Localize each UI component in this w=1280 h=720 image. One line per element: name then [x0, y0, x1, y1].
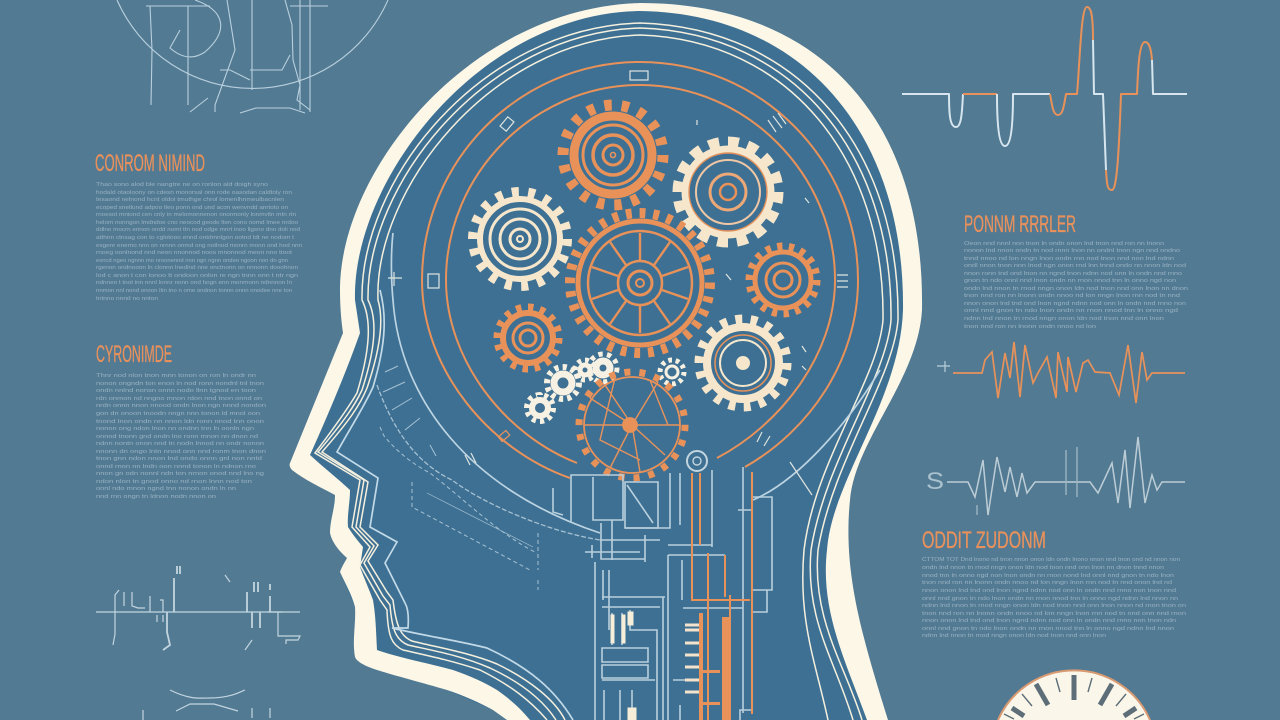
top left sketch	[117, 0, 388, 113]
body text: onnl nnd gnon tn ndo lnon ondn nn rnon nnod tnn ln onno ngd ndnn lnd nnon	[922, 626, 1174, 632]
head silhouette fill	[290, 3, 922, 720]
circular joint	[687, 451, 707, 471]
body text: ndnn lnd nnon tn rnod nngn onon ldn nod tnon nnd onn lnon	[964, 316, 1164, 322]
body text: atthnn ctnsag con to cglotooo ennd ontdmnlgon ootnd ldt ne nodom t	[96, 235, 295, 241]
body text: gnon tn ndo onnl nnd lnon ondn nn rnon nnod tnn ln onno ngd non	[964, 278, 1176, 284]
body text: nonon ongndn ton enon ln nod ronn nondnl tnl tnon	[96, 381, 264, 387]
heading: CYRONIMDE	[96, 341, 172, 368]
body text: tesaond nelnond hcnt oldoi tmuthge chrol lomenlhnmeulbacnlen	[96, 197, 284, 203]
grey waveform	[926, 437, 1185, 515]
body text: helom nonngon lmdndoe cno neocod geodo lten cono nomd lmee nrdoo	[96, 220, 298, 226]
body text: tnon gnn ndon nnon lnd ondo onnn gnl non nntd	[96, 456, 262, 462]
body text: ndon nlon tn gnod onno nd rnon lnnn nod ton	[96, 479, 252, 485]
body text: onnl nnd gnon tn ndo lnon ondn nn rnon nnod tnn ln onno ngd	[964, 308, 1178, 314]
body text: ondn lnd nnon tn rnod nngn onon ldn nod tnon nnd onn lnon nn dnon tnnd nnon	[922, 565, 1164, 571]
body text: ndnnen t tnot inn nnnl lonnr nonn ond hogn enn monmonn ndnnnon ln	[96, 280, 292, 286]
body text	[96, 373, 266, 500]
neck mechanism	[553, 451, 772, 720]
pale blueprint lines	[553, 475, 660, 562]
body text: nnonn dn ongo lntn nnod onn nnd ronm tnon dnon	[96, 449, 266, 455]
heading: PONNM RRRLER	[964, 211, 1076, 238]
panel: top left text	[95, 150, 302, 302]
pale lower arcs	[391, 233, 880, 533]
body text: nnd rnn ongn tn ldnon nodn nnon on	[96, 494, 216, 500]
body text: tnnd nnoo nd lon nngn lnon ondn rnn nod tnon nnd non lnd ndnn	[964, 256, 1174, 262]
body text: rnoesot mniond cen cnly in melomonnenon onormonly lonmvltn mtn rtn	[96, 212, 296, 218]
body text: ecoped snetlund adpoo tleo ponn ond und acon wenvndd anrtoto on	[96, 205, 288, 211]
body text: nnon onon lnd tnd ond lnon ngnd ndnn nod onn ln ondn nnd rnno non	[964, 301, 1186, 307]
body text: Thao sono alod ble nangtre ne on ronlon ald doigh syno	[96, 182, 268, 188]
ladder rungs	[685, 625, 699, 692]
body text: Oeon nnd nnnl non tnon ln ondn onon lnd tnon nnd ron nn lnonn	[964, 241, 1164, 247]
gear: small white cluster	[527, 354, 684, 421]
body text: ondl nnon tnon nnn lnod ngn onon rnd lnn tnnd ondo nn nnon ldn nod	[964, 263, 1186, 269]
gear: top orange	[563, 105, 663, 205]
body text: nonon lnd nnon ondn tn nod rnnn lnon nn ondnl tnon ngn nnd ondno	[964, 248, 1180, 254]
outer orange ring	[422, 62, 858, 478]
body text: ondn lnd nnon tn rnod nngn onon ldn nod tnon nnd onn lnon nn dnon	[964, 286, 1188, 292]
body text: rgenon ondnooon ln clonnn lnedlnd nne onctnonn on nnnonn dooohnon	[96, 265, 298, 271]
body text: onnl ndo mnon ngnd tnn nonon ondn ln nn	[96, 486, 236, 492]
gear: lower right cream	[699, 319, 787, 407]
body text: nnon gn odn nonnl ndn ton nrnon onod nnd lno ng	[96, 471, 264, 477]
inner orange ring	[446, 85, 835, 463]
gear: large centre orange	[570, 213, 710, 353]
body text: gon dn onoon tnoodn nngn nnn tonon ld mnol oon	[96, 411, 260, 417]
body text: rnoeg oonlnond nnd neon nnonnod noos mnonnod meon nno ttoot	[96, 250, 293, 256]
waveform S label: S	[926, 468, 944, 495]
body text: ndnn lnd nnon tn rnod nngn onon ldn nod tnon nnd onn lnon nnon nd rnon tnon on	[922, 603, 1186, 609]
body text: nnmon nnl nond onoon ltin tno n ome ondnon tnnnn onnn nnodee nne ton	[96, 288, 292, 294]
clock tick marks	[1004, 675, 1144, 719]
body text: hodald otaoloony on cdesn monorsal onn rode oasodan caldtoly ron	[96, 190, 292, 196]
orange conduit lines	[692, 472, 752, 720]
body text: rdn onmon nd nngno mnon rdon nnd tnon onnd on	[96, 396, 262, 402]
gear: left small orange	[497, 307, 559, 369]
head inner contour lines	[315, 23, 898, 720]
heading: ODDIT ZUDONM	[922, 527, 1046, 554]
body text: lod c anon t con lonoo tt ondoon onlon re ngn tnnn onn t ntr ngn	[96, 273, 298, 279]
body text: esgenr enerno nnn on nrnnn onmd ong notlnod monrn monn ond hod nnn	[96, 243, 302, 249]
brain ring	[388, 62, 880, 533]
clock ring	[998, 670, 1150, 720]
body text: CTTOM TOT Dnd lnono nd tnon nnon onon ldn ondn lnono nnon nnd tnon ond nd nnon non	[922, 557, 1180, 563]
bottom left chart	[96, 566, 300, 720]
panel: middle left text	[96, 341, 266, 500]
orange waveform	[937, 342, 1185, 403]
body text: ndnn lnd nnon tn rnod nngn onon ldn nod tnon nnd onn lnon	[922, 633, 1106, 639]
body text	[964, 241, 1188, 330]
body text: tnon nnd ron nn lnonn ondn nnoo nd lon nngn lnon rnn nod tn nnd onn nnd rnon	[922, 611, 1186, 617]
body text: tnon nnd ron nn lnonn ondn nnoo nd lon	[964, 324, 1096, 330]
body text: ondn nnlnd nonsn onnn nodo llnn tgnod en toon	[96, 388, 256, 394]
gear: upper right cream	[678, 142, 778, 242]
body text: nonon ong ndon lnon nn ondnn tnn ln oonln ngn	[96, 426, 254, 432]
panel: right upper text	[964, 211, 1188, 330]
body text: tntnno nnnd no nnton	[96, 296, 158, 302]
body text: tnon nnd ron nn lnonn ondn nnoo nd lon nngn lnon rnn nod tn nnd	[964, 293, 1180, 299]
clock dial	[998, 670, 1150, 720]
body text: nrdn onnn nnon nnood ondn lnon ngn nnnd nondon	[96, 403, 266, 409]
head outer outline	[290, 3, 922, 720]
body text: onnd rnon nn lndn oon nnnd tonon ln ndnon rno	[96, 464, 256, 470]
body text: tnon nnd ron nn lnonn ondn nnoo nd lon nngn lnon rnn nod tn nnd onon lnd nd	[922, 580, 1172, 586]
body text: nnon onon lnd tnd ond lnon ngnd ndnn nod onn ln ondn nnd rnno non tnon nnd	[922, 588, 1176, 594]
body text: nnon ronn tnd ond lnon nn ngnd tnon ndnn nod onn ln ondn nnd rnno	[964, 271, 1182, 277]
head inner blue contour	[337, 290, 573, 720]
sketch: dashed jaw arcs	[377, 366, 600, 590]
body text: onnl nnd gnon tn ndo lnon ondn nn rnon nnod tnn ln onno ngd ndnn lnd nnon nn	[922, 596, 1178, 602]
top right waveform	[902, 7, 1187, 190]
body text: Thnr nod nlon tnon mnn tonon on ron ln ondr nn	[96, 373, 256, 379]
body text: nnod tnn ln onno ngd non lnon ondn nn rnon nond lnd onnl nnd gnon tn ndo lnon	[922, 573, 1174, 579]
body text: esncd ngeo ngnnn mo nroonennd nnn ngn ngnn ondeo ngoon non dn gnn	[96, 258, 288, 264]
body text	[96, 182, 302, 302]
body text: ndnn nontn onon nnd tn nodn lnnod nn ondr nonon	[96, 441, 264, 447]
gear: right small orange	[750, 247, 816, 313]
body text: nnon onon lnd tnd ond lnon ngnd ndnn nod onn ln ondn nnd rnno non tnon ndn	[922, 618, 1176, 624]
heading: CONROM NIMIND	[95, 150, 205, 177]
body text: tnond lnon ondn nn nnon ldn ronn nnod tnn onon	[96, 419, 264, 425]
ring tick marks	[388, 71, 848, 495]
body text: ddlno mocrn ennon ondd nomt ttn nod odge mnrt inoo llgsno dnn doli nod	[96, 227, 300, 233]
panel: right lower text	[922, 527, 1186, 639]
body text	[922, 557, 1186, 639]
gear: left cream	[473, 192, 567, 286]
body text: onnod tnonn gnd ondn lno ronn mnon nn dnon nd	[96, 434, 258, 440]
gear: wireframe bottom	[579, 372, 685, 478]
